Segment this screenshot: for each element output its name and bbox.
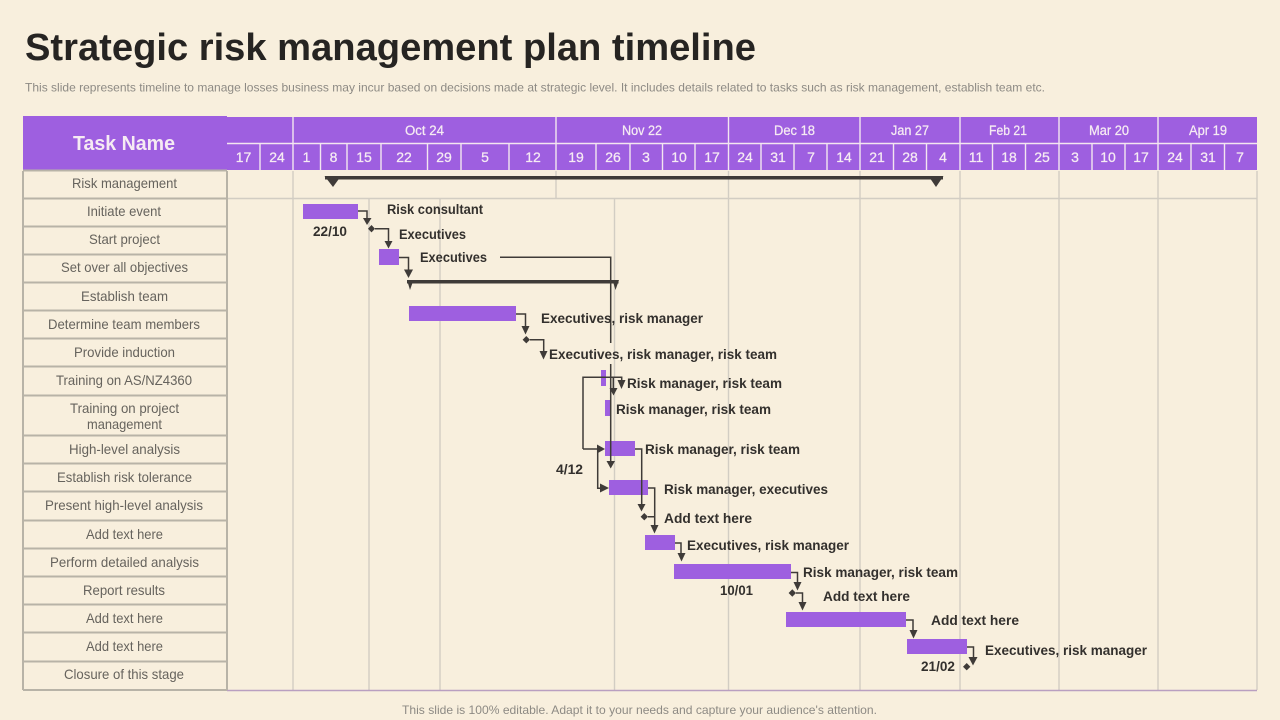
task labels: Present high-level analysis: [45, 497, 203, 513]
week labels: 15: [356, 149, 372, 165]
week labels: 31: [770, 149, 786, 165]
task name heading: Task Name: [73, 133, 175, 155]
resource labels: Executives, risk manager, risk team: [549, 347, 777, 362]
resource labels: Risk manager, executives: [664, 482, 828, 497]
week labels: 17: [1133, 149, 1149, 165]
milestone dates: 21/02: [921, 659, 955, 674]
resource labels: Executives, risk manager: [687, 538, 850, 553]
task labels: Training on project: [70, 400, 179, 416]
task labels: Add text here: [86, 638, 163, 654]
week labels: 14: [836, 149, 852, 165]
resource labels: Executives: [399, 227, 466, 242]
task labels: High-level analysis: [69, 441, 180, 457]
resource labels: Add text here: [931, 613, 1019, 628]
month labels: [405, 123, 1227, 138]
week labels: 25: [1034, 149, 1050, 165]
week labels: 29: [436, 149, 452, 165]
week labels: 21: [869, 149, 885, 165]
resource labels: [387, 202, 1148, 658]
task labels: Determine team members: [48, 316, 200, 332]
month labels: Jan 27: [891, 123, 929, 138]
resource labels: Risk manager, risk team: [645, 442, 800, 457]
week labels: 22: [396, 149, 412, 165]
week labels: 5: [481, 149, 489, 165]
milestone dates: 4/12: [556, 462, 583, 477]
milestone dates: 10/01: [720, 583, 753, 598]
task labels: Risk management: [72, 175, 177, 191]
panel: timeline header: [227, 117, 1257, 170]
week labels: 26: [605, 149, 621, 165]
week labels: 28: [902, 149, 918, 165]
resource labels: Executives, risk manager: [985, 643, 1148, 658]
task labels: Start project: [89, 231, 160, 247]
chart grid: [227, 171, 1257, 690]
task labels: [45, 175, 203, 682]
task labels: Establish team: [81, 288, 168, 304]
week labels: 4: [939, 149, 947, 165]
week labels: [236, 149, 1244, 165]
resource labels: Executives: [420, 250, 487, 265]
month labels: Dec 18: [774, 123, 815, 138]
task labels: management: [87, 416, 162, 432]
week labels: 3: [1071, 149, 1079, 165]
resource labels: Add text here: [823, 589, 910, 604]
week labels: 8: [330, 149, 338, 165]
resource labels: Risk manager, risk team: [627, 376, 782, 391]
footer note: This slide is 100% editable. Adapt it to your needs and capture your audience's attention.: [402, 703, 877, 717]
week labels: 31: [1200, 149, 1216, 165]
task labels: Initiate event: [87, 203, 161, 219]
task name heading: [23, 116, 227, 170]
week labels: 19: [568, 149, 584, 165]
resource labels: Risk manager, risk team: [803, 565, 958, 580]
week labels: 10: [671, 149, 687, 165]
task labels: Training on AS/NZ4360: [56, 372, 192, 388]
task bars: [303, 204, 967, 654]
title: Strategic risk management plan timeline: [25, 27, 756, 69]
week labels: 17: [236, 149, 251, 165]
resource labels: Risk manager, risk team: [616, 402, 771, 417]
week labels: 3: [642, 149, 650, 165]
week labels: 24: [269, 149, 285, 165]
task labels: Set over all objectives: [61, 259, 188, 275]
summary bar: establish team: [407, 280, 619, 290]
week labels: 7: [807, 149, 815, 165]
month labels: Apr 19: [1189, 123, 1227, 138]
task labels: Report results: [83, 582, 165, 598]
month labels: Oct 24: [405, 123, 444, 138]
resource labels: Executives, risk manager: [541, 311, 704, 326]
task labels: Add text here: [86, 610, 163, 626]
milestone dates: [313, 224, 955, 674]
week labels: 12: [525, 149, 541, 165]
week labels: 18: [1001, 149, 1017, 165]
week labels: 17: [704, 149, 720, 165]
task labels: Add text here: [86, 526, 163, 542]
month labels: Mar 20: [1089, 123, 1129, 138]
week labels: 24: [1167, 149, 1183, 165]
task labels: Establish risk tolerance: [57, 469, 192, 485]
week labels: 24: [737, 149, 753, 165]
month labels: Feb 21: [989, 123, 1027, 138]
description text: This slide represents timeline to manage losses business may incur based on decisions made at strategic level. It includes details related to tasks such as risk management, establish team etc.: [25, 80, 1045, 94]
resource labels: Risk consultant: [387, 202, 483, 217]
task labels: Provide induction: [74, 344, 175, 360]
week labels: 11: [969, 149, 983, 165]
task labels: Closure of this stage: [64, 666, 184, 682]
month labels: Nov 22: [622, 123, 662, 138]
resource labels: Add text here: [664, 511, 752, 526]
milestone diamonds: [368, 225, 970, 670]
dependency connectors: [358, 211, 974, 658]
week labels: 7: [1236, 149, 1244, 165]
week labels: 1: [303, 149, 311, 165]
arrowheads: [363, 218, 978, 666]
panel: task name column: [23, 116, 227, 690]
task labels: Perform detailed analysis: [50, 554, 199, 570]
milestone dates: 22/10: [313, 224, 347, 239]
week labels: 10: [1100, 149, 1116, 165]
summary bar: risk management: [324, 176, 944, 187]
